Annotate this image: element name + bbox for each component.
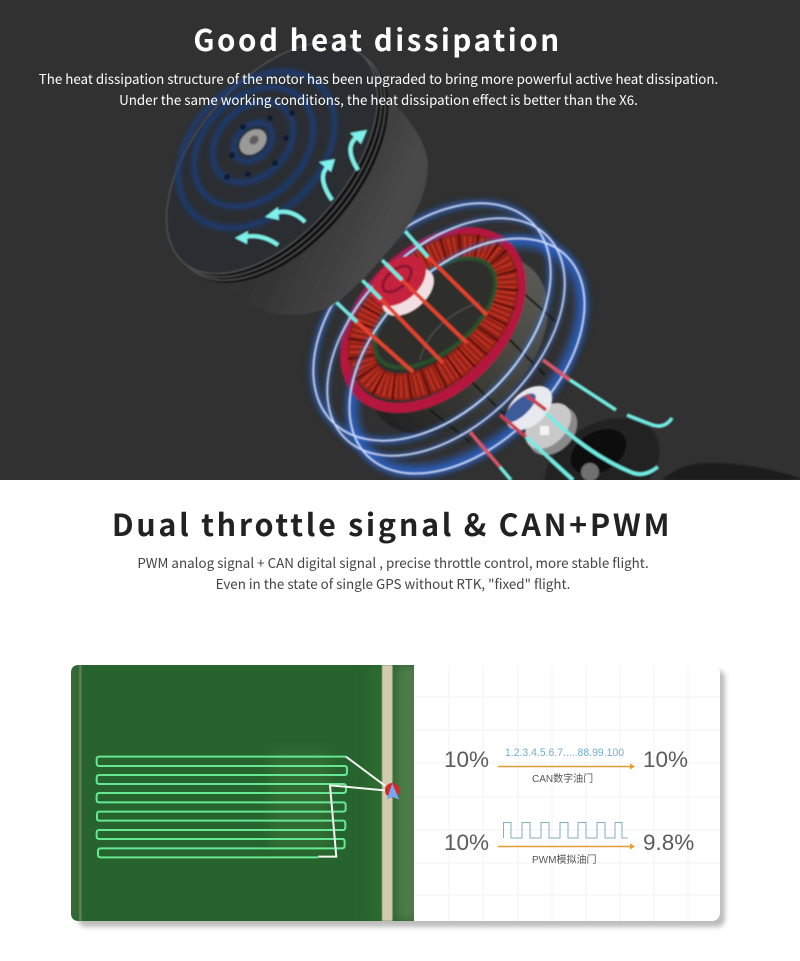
CAN output value: 10%	[643, 747, 688, 772]
bright rings	[268, 158, 629, 518]
fin bands	[126, 4, 429, 321]
row: PWM analog throttle	[444, 822, 694, 866]
card surface	[71, 665, 720, 921]
inner shaft arc	[420, 302, 480, 360]
stator body	[334, 221, 582, 469]
green route	[97, 757, 347, 857]
motor housing	[126, 4, 429, 321]
panel: throttle comparison card	[71, 665, 728, 930]
text block: heat description	[39, 69, 718, 109]
PWM label: PWM模拟油门	[532, 853, 596, 866]
motor top face	[126, 4, 418, 312]
chart grid	[414, 665, 720, 921]
flight path	[97, 757, 400, 857]
airflow arrows	[240, 135, 360, 245]
arrow heads	[235, 130, 367, 244]
rear bracket	[662, 463, 800, 480]
stator assembly	[268, 158, 800, 533]
text block: heat description: The heat dissipation structure of the motor has been upgraded to bring more powerful active heat dissipation.	[39, 69, 718, 88]
text block: heat description: Under the same working conditions, the heat dissipation effect is better than the X6.	[119, 90, 638, 109]
aerial map	[66, 665, 420, 921]
text block: throttle description: PWM analog signal + CAN digital signal , precise throttle control, more stable flight.	[137, 552, 649, 572]
copper coils	[335, 220, 531, 414]
blue glow bands	[268, 158, 625, 514]
CAN label: CAN数字油门	[532, 772, 593, 785]
PWM square wave	[504, 822, 628, 838]
PWM arrow	[498, 844, 635, 850]
stator hole	[355, 238, 515, 388]
text block: throttle description	[137, 552, 649, 593]
road	[382, 665, 392, 921]
CAN sequence: 1.2.3.4.5.6.7.....88.99.100	[505, 747, 624, 759]
panel: heat dissipation	[0, 0, 800, 480]
crimson ring	[311, 198, 555, 442]
CAN arrow	[498, 764, 635, 770]
blue glow circles	[148, 41, 365, 259]
PWM output value: 9.8%	[643, 830, 694, 855]
silver coupling	[498, 377, 587, 465]
heading: good heat dissipation: Good heat dissipation	[193, 18, 562, 60]
heat flow lines	[333, 231, 672, 480]
housing side wall	[186, 85, 428, 315]
screw holes	[224, 110, 295, 180]
card shadow	[78, 670, 725, 927]
motor illustration	[166, 41, 800, 480]
stator dark stripes	[430, 290, 556, 442]
centre hub	[234, 124, 272, 160]
row: CAN digital throttle	[444, 747, 688, 785]
PWM input value: 10%	[444, 830, 489, 855]
drone marker	[385, 783, 400, 800]
text block: throttle description: Even in the state of single GPS without RTK, "fixed" flight.	[216, 573, 570, 593]
small red bearing	[362, 246, 443, 325]
rear motor	[527, 399, 677, 533]
left farm track	[79, 665, 82, 921]
field texture	[66, 665, 420, 921]
white route	[318, 757, 385, 857]
heading: dual throttle signal: Dual throttle signal & CAN+PWM	[112, 501, 672, 545]
CAN input value: 10%	[444, 747, 489, 772]
